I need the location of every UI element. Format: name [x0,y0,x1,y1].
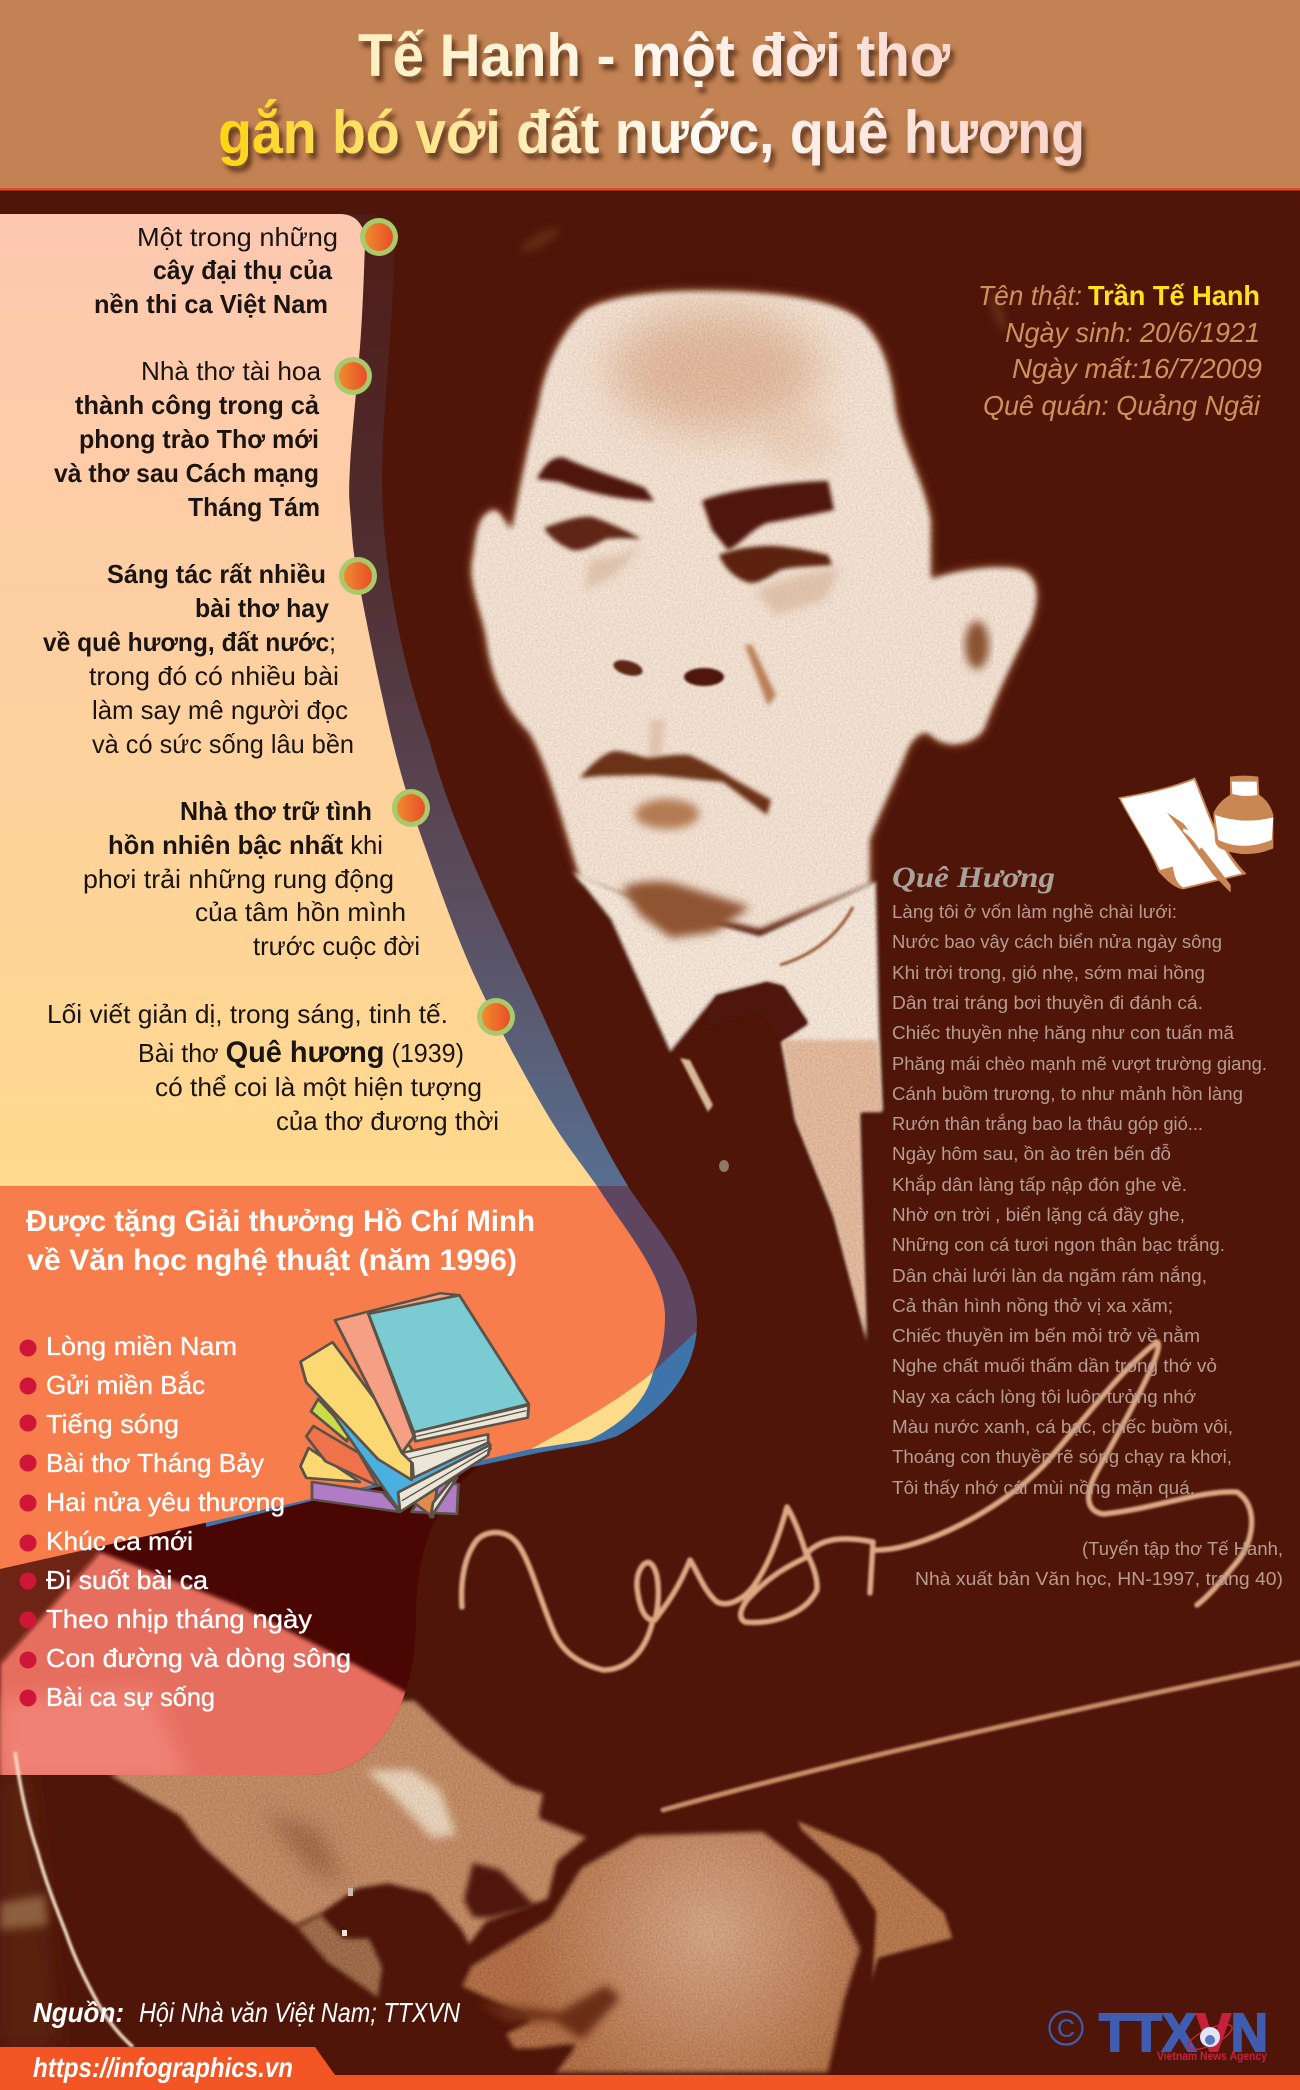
brown halo round the face [470,290,1038,930]
icon: stack of books [300,1293,529,1517]
logo: TTXVN: TTXVN [1099,2003,1268,2063]
text block 5: Lối viết giản dị, trong sáng, tinh tế. [47,999,448,1029]
award heading: Được tặng Giải thưởng Hồ Chí Minh [26,1205,535,1238]
text block 2: phong trào Thơ mới [79,424,319,454]
list of works: Hai nửa yêu thương [46,1487,285,1517]
poem text: Chiếc thuyền nhẹ hăng như con tuấn mã [892,1022,1235,1043]
list of works: Bài ca sự sống [46,1682,215,1712]
photo specks [348,1888,353,1896]
text block 3: trong đó có nhiều bài [89,661,339,691]
poem text: Chiếc thuyền im bến mỏi trở về nằm [892,1325,1200,1346]
award heading [26,1205,535,1277]
text block 4: phơi trải những rung động [83,864,394,894]
chin shadow [622,882,750,938]
text block 4: hồn nhiên bậc nhất khi [108,830,383,860]
blue band tail [206,1331,697,1527]
list of works: Theo nhịp tháng ngày [46,1604,312,1634]
poem text: Phăng mái chèo mạnh mẽ vượt trường giang. [892,1053,1267,1074]
text block 3: Sáng tác rất nhiều [107,559,326,589]
text block 2: thành công trong cả [75,390,320,420]
lower-left brown tones [0,1775,60,2047]
long pen stroke [663,1663,1300,1810]
list of works: Gửi miền Bắc [46,1370,205,1400]
ear detail [965,621,989,669]
poem text: Nay xa cách lòng tôi luôn tưởng nhớ [892,1386,1196,1407]
face and ear skin [470,290,1038,930]
poem text: Nghe chất muối thấm dần trong thớ vỏ [892,1355,1217,1376]
poem source: (Tuyển tập thơ Tế Hanh, [1082,1538,1283,1559]
dark pocket between hands [464,1863,536,1918]
dark gap between fingers [478,1985,620,2040]
source credit: Nguồn: [33,1997,124,2028]
forearm highlight [366,1770,456,1838]
poem text: Cả thân hình nồng thở vị xa xăm; [892,1295,1173,1316]
text block 5 [47,999,499,1136]
poem text: Khắp dân làng tấp nập đón ghe về. [892,1174,1187,1195]
text block 3: và có sức sống lâu bền [92,729,354,759]
forearm shading [262,1810,345,1885]
panel: list backdrop overlay [0,1440,520,1780]
title [218,22,1085,166]
list of works: Đi suốt bài ca [46,1565,209,1595]
poem text: Rướn thân trắng bao la thâu góp gió... [892,1113,1203,1134]
right eye [719,546,832,583]
text block 2: và thơ sau Cách mạng [54,458,319,488]
poem text: Tôi thấy nhớ cái mùi nồng mặn quá. [892,1477,1195,1498]
left eye [544,517,641,550]
poem source: Nhà xuất bản Văn học, HN-1997, trang 40) [915,1568,1283,1589]
biography facts: Ngày mất:16/7/2009 [1012,353,1262,384]
tie highlight [680,1058,713,1112]
left hand and forearm [107,1699,589,1947]
text block 1: cây đại thụ của [153,255,333,285]
list of works: Lòng miền Nam [46,1331,237,1361]
list of works [46,1331,351,1712]
poem title: Quê Hương [892,861,1055,894]
logo: TTXVN: C [1057,2015,1075,2043]
biography facts: Trần Tế Hanh [1088,280,1260,311]
list of works: Con đường và dòng sông [46,1643,351,1673]
background smudges [518,224,1010,334]
footer url tab: https://infographics.vn [33,2052,293,2083]
poem text: Ngày hôm sau, ồn ào trên bến đỗ [892,1143,1171,1164]
text block 4: của tâm hồn mình [195,897,406,927]
signature [462,1342,1252,1670]
timeline dot 4 [392,789,430,827]
poem text: Cánh buồm trương, to như mảnh hồn làng [892,1083,1243,1104]
award heading: về Văn học nghệ thuật (năm 1996) [27,1244,517,1277]
finger [295,1913,384,2000]
timeline dot 2 [334,357,372,395]
poem text: Nước bao vây cách biển nửa ngày sông [892,931,1222,952]
list bullets [20,1340,36,1706]
text block 1: nền thi ca Việt Nam [94,289,328,319]
footer url tab [0,2047,335,2090]
text block 2 [54,356,322,522]
logo: TTXVN: Vietnam News Agency [1157,2051,1268,2063]
text block 2: Nhà thơ tài hoa [141,356,322,386]
text block 4: Nhà thơ trữ tình [180,796,372,826]
neck crease [780,907,853,965]
right eyebrow [702,481,834,550]
poem text: Dân chài lưới làn da ngăm rám nắng, [892,1265,1207,1286]
poem source [915,1538,1283,1589]
timeline dot 1 [360,218,398,256]
mouth [580,751,771,815]
poem text [892,901,1267,1498]
poem text: Làng tôi ở vốn làm nghề chài lưới: [892,901,1177,922]
poem text: Nhờ ơn trời , biển lặng cá đầy ghe, [892,1204,1185,1225]
forehead shading [610,308,820,432]
yellow wedge [531,1372,653,1449]
thin white line [15,1752,133,2047]
list of works: Bài thơ Tháng Bảy [46,1448,264,1478]
biography facts [978,280,1262,421]
text block 3: về quê hương, đất nước; [43,627,336,657]
biography facts: Tên thật: [978,280,1082,311]
text block 3: làm say mê người đọc [92,695,348,725]
title: Tế Hanh - một đời thơ [358,22,950,89]
text block 5: của thơ đương thời [276,1106,499,1136]
footer bar [0,2075,1300,2090]
poem text: Màu nước xanh, cá bạc, chiếc buồm vôi, [892,1416,1233,1437]
timeline dot 3 [339,557,377,595]
shirt shading [782,1040,883,1344]
hands [107,1699,954,2074]
title: gắn bó với đất nước, quê hương [218,99,1085,166]
biography facts: Quê quán: Quảng Ngãi [983,390,1261,421]
poem text: Khi trời trong, gió nhẹ, sớm mai hồng [892,962,1205,983]
text block 1 [94,222,338,319]
panel: career highlights [0,214,597,1186]
list of works: Khúc ca mới [46,1526,193,1556]
text block 5: có thể coi là một hiện tượng [155,1072,482,1102]
right hand [460,1830,862,2074]
tie knot [700,983,807,1041]
text block 4: trước cuộc đời [253,931,420,961]
poem text: Những con cá tươi ngon thân bạc trắng. [892,1234,1225,1255]
source credit: Hội Nhà văn Việt Nam; TTXVN [139,1997,461,2028]
panel: award [0,1186,665,1569]
icon: paper, pen and ink bottle [1118,776,1273,893]
header banner [0,0,1300,190]
left eyebrow [537,457,654,501]
poem text: Thoáng con thuyền rẽ sóng chạy ra khơi, [892,1446,1232,1467]
text block 1: Một trong những [137,222,338,252]
list of works: Tiếng sóng [46,1409,179,1439]
text block 5: Bài thơ Quê hương (1939) [138,1036,464,1069]
poem text: Dân trai tráng bơi thuyền đi đánh cá. [892,992,1203,1013]
source credit [33,1997,461,2028]
shirt collar and front [570,870,883,1344]
text block 2: Tháng Tám [188,492,320,522]
text block 3 [43,559,354,759]
text block 3: bài thơ hay [195,593,330,623]
curved purple band [200,214,720,1540]
face and shirt [470,290,1038,1344]
biography facts: Ngày sinh: 20/6/1921 [1005,317,1260,348]
cuff [796,1819,954,1986]
text block 4 [83,796,420,961]
timeline dot 5 [477,998,515,1036]
nose [612,657,644,679]
